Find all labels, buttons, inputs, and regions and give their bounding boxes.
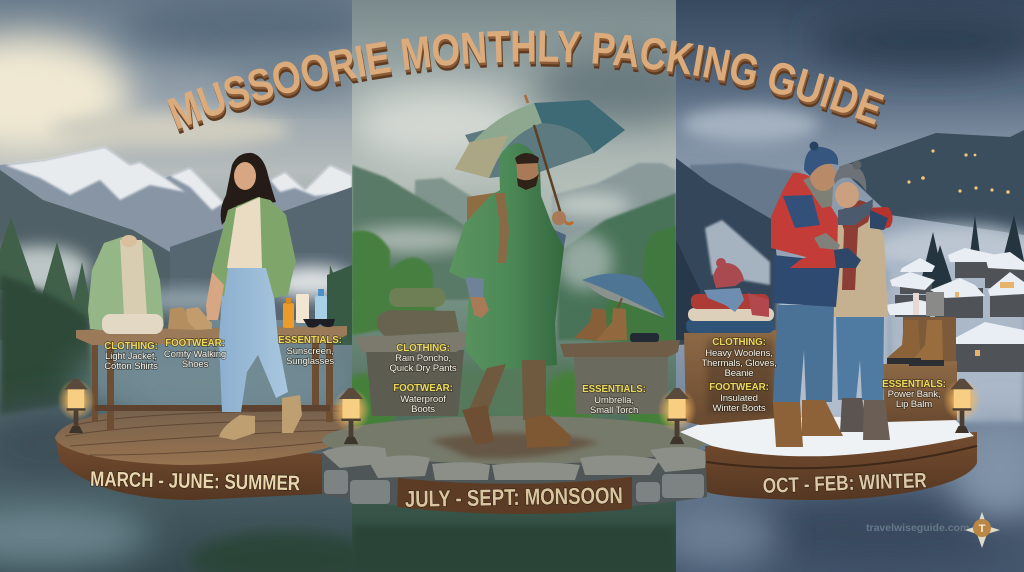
man head and beanie [803, 142, 838, 208]
logo: star badge with T [965, 512, 1000, 548]
summer essentials text: ESSENTIALS: [278, 335, 342, 346]
stone pedestal right [560, 340, 680, 414]
hair [221, 153, 276, 225]
winter clothing text: CLOTHING: [712, 337, 766, 348]
foliage left [352, 230, 436, 335]
winter essentials text: ESSENTIALS: [882, 379, 946, 390]
snowy mountains [0, 146, 352, 252]
arm [206, 272, 224, 320]
blue sleeve [548, 228, 566, 262]
boots [462, 405, 494, 445]
winter clothing text: Thermals, Gloves, [701, 358, 777, 369]
lantern right [943, 379, 981, 433]
stacked woolens [686, 258, 774, 333]
panel: monsoon platform [322, 95, 708, 514]
monsoon essentials text: Umbrella, [594, 395, 634, 406]
panel: winter background [660, 0, 1024, 572]
monsoon clothing text: Quick Dry Pants [389, 363, 457, 374]
legs [468, 360, 546, 420]
sunscreen and sunglasses [283, 289, 335, 328]
winter essentials text: Lip Balm [896, 399, 932, 410]
monsoon essentials text: Small Torch [590, 405, 638, 416]
summer footwear text: Comfy Walking [164, 349, 226, 360]
lantern between left and middle [331, 388, 371, 444]
summer footwear text: Shoes [182, 359, 209, 370]
village [885, 215, 1024, 372]
man far arm [865, 207, 893, 235]
winter footwear text: FOOTWEAR: [709, 382, 769, 393]
monsoon footwear text: Boots [411, 404, 435, 415]
lantern far left [57, 379, 95, 433]
foliage right [590, 225, 676, 345]
summer essentials text: Sunscreen, [286, 346, 334, 357]
title: Mussoorie Monthly Packing Guide: MUSSOORIE MONTHLY PACKING GUIDE [167, 30, 884, 129]
hand with handle [552, 211, 566, 225]
winter footwear text: Insulated [720, 393, 758, 404]
jacket on stand [88, 235, 164, 330]
title: Mussoorie Monthly Packing Guide: MUSSOORIE MONTHLY PACKING GUIDE [168, 36, 886, 134]
monsoon season label: JULY - SEPT: MONSOON [405, 482, 623, 512]
panel: monsoon background [352, 0, 676, 572]
panel: summer background [0, 0, 380, 572]
panel: winter platform [680, 142, 977, 500]
small umbrella [582, 273, 665, 325]
watermark: travelwiseguide.com [866, 522, 969, 534]
panel: summer platform [55, 153, 347, 500]
folded towel [102, 314, 163, 334]
monsoon clothing text: Rain Poncho, [395, 353, 451, 364]
logo: star badge with T: T [979, 523, 986, 535]
wooden drum [705, 432, 977, 500]
title: Mussoorie Monthly Packing Guide: MUSSOORIE MONTHLY PACKING GUIDE [168, 33, 885, 132]
winter season label: OCT - FEB: WINTER [762, 469, 927, 498]
winter essentials text: Power Bank, [888, 389, 940, 400]
woman sweater [834, 215, 888, 317]
summer season label: MARCH - JUNE: SUMMER [90, 468, 300, 495]
torch [630, 333, 659, 342]
stone pedestal left [355, 332, 466, 416]
woman scarf [838, 200, 873, 290]
muddy stone floor [322, 416, 708, 464]
poncho [449, 143, 564, 371]
man jacket [771, 173, 840, 307]
summer essentials text: Sunglasses [286, 356, 334, 367]
boots crate [883, 292, 957, 422]
walking shoes [168, 307, 212, 330]
woman [206, 153, 302, 440]
summer footwear text: FOOTWEAR: [165, 338, 225, 349]
boots on pedestal [574, 308, 627, 341]
snow [680, 416, 974, 456]
woman jeans [836, 317, 884, 400]
couple [771, 142, 893, 447]
summer clothing text: Cotton Shirts [104, 361, 158, 372]
winter clothing text: Beanie [725, 368, 753, 379]
woman head and beanie [834, 160, 873, 225]
monsoon clothing text: CLOTHING: [396, 343, 450, 354]
boots [773, 398, 890, 447]
shoes [219, 415, 255, 440]
monsoon footwear text: Waterproof [400, 394, 446, 405]
winter clothing text: Heavy Woolens, [705, 348, 773, 359]
summer clothing text: Light Jacket, [105, 351, 157, 362]
nameplate plank [397, 477, 632, 514]
gloves [814, 210, 888, 268]
summer clothing text: CLOTHING: [104, 341, 158, 352]
man jeans [773, 305, 834, 402]
face [516, 158, 539, 190]
strap [495, 193, 509, 263]
backpack [467, 192, 505, 225]
shirt [227, 197, 262, 268]
bench table [76, 326, 347, 430]
stone wall [322, 450, 707, 514]
lantern between middle and right [657, 388, 697, 444]
forest [0, 218, 360, 415]
arm and hand [465, 277, 484, 297]
winter footwear text: Winter Boots [712, 403, 766, 414]
platform band [55, 436, 322, 500]
rolled clothes [377, 288, 459, 336]
green jacket [212, 197, 296, 298]
clothes crate [684, 330, 778, 425]
jeans [219, 268, 288, 412]
umbrella [455, 95, 625, 224]
monsoon footwear text: FOOTWEAR: [393, 383, 453, 394]
monsoon essentials text: ESSENTIALS: [582, 384, 646, 395]
wooden deck [55, 405, 345, 465]
man in poncho [449, 95, 625, 448]
